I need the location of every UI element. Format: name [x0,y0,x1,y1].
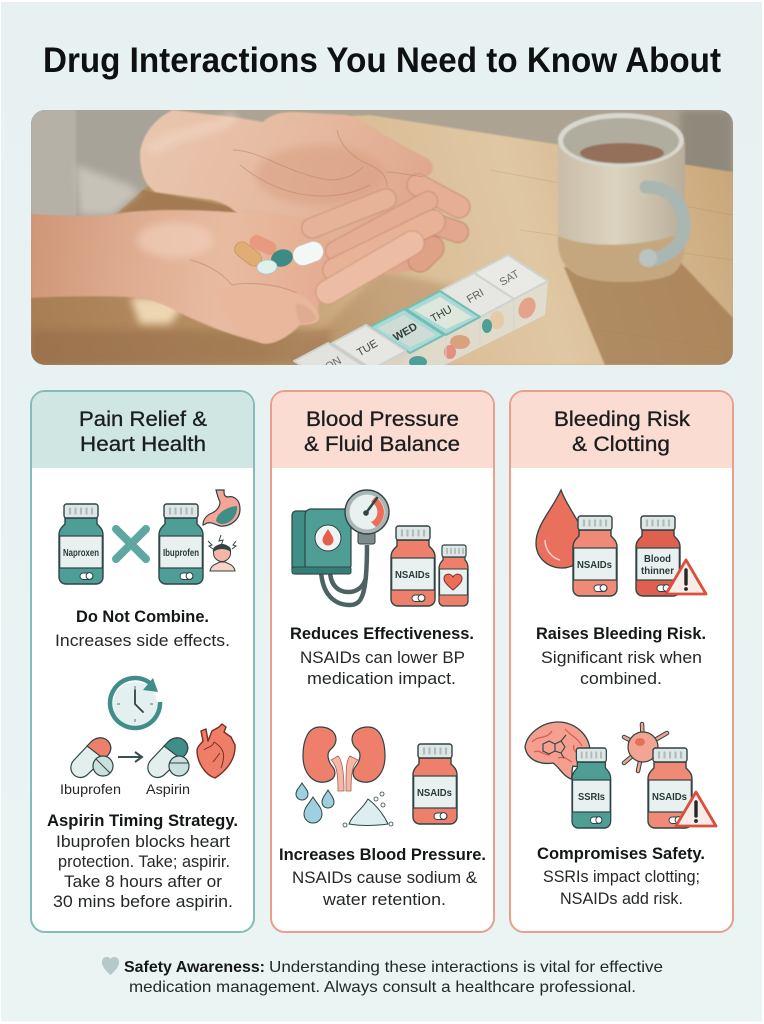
icon: nsaids bottle [573,516,617,596]
icon: do not combine cross [116,529,146,559]
icon: headache [208,535,236,571]
icon: kidneys [303,727,385,791]
text: aspirin timing strategy [47,812,238,911]
panel: bleeding risk and clotting [510,391,733,932]
text: reduces effectiveness: medication impact. [307,670,456,688]
icon: blood thinner bottle with warning: Blood [644,553,671,565]
photo: weekly pill organizer: TUE [355,338,380,359]
text: do not combine: Do Not Combine. [76,608,209,626]
icon: aspirin capsule [148,738,189,777]
text: increases blood pressure [279,846,486,909]
heading: blood pressure: Blood Pressure [306,408,459,431]
text: reduces effectiveness [290,625,474,688]
arrow: ibuprofen to aspirin [118,752,142,762]
photo: upper hand back fingers [418,185,459,260]
icon: nsaids bottle [413,744,457,824]
icon: nsaids bottle: NSAIDs [395,569,430,581]
heading: bleeding risk: & Clotting [572,433,670,456]
text: compromises safety: NSAIDs add risk. [560,890,683,908]
text: do not combine: Increases side effects. [55,632,230,650]
photo: weekly pill organizer: SAT [498,268,522,289]
icon: blood thinner bottle with warning [636,516,706,596]
text: increases blood pressure: Increases Blood Pressure. [279,846,486,864]
labels: ibuprofen and aspirin [60,781,190,797]
icon: clock with rotating arrow [110,678,160,728]
labels: ibuprofen and aspirin: Ibuprofen [60,781,121,797]
text: raises bleeding risk: Raises Bleeding Risk. [536,625,706,643]
icon: stomach [203,490,240,526]
icon: blood pressure cuff and gauge [292,490,389,605]
icon: nsaids bottle: NSAIDs [577,559,612,571]
icon: salt pile [343,792,393,827]
text: increases blood pressure: NSAIDs cause sodium & [292,869,477,887]
panel: blood pressure and fluid balance [271,391,494,932]
text: compromises safety: Compromises Safety. [537,845,705,863]
photo: lower hand [31,199,433,343]
icon: naproxen bottle [59,504,103,584]
icon: nsaids bottle: NSAIDs [417,787,452,799]
photo: weekly pill organizer: WED [391,321,420,344]
text: raises bleeding risk [536,625,706,688]
text: aspirin timing strategy: Take 8 hours after or [64,873,223,891]
heading: blood pressure [304,408,460,456]
photo: lower hand fingers [312,199,433,292]
icon: nsaids bottle with warning [648,748,716,828]
icon: brain [525,722,590,779]
labels: ibuprofen and aspirin: Aspirin [146,781,190,797]
text: aspirin timing strategy: protection. Take; aspirir. [58,853,230,871]
icon: ibuprofen bottle: Ibuprofen [163,547,199,559]
heading: bleeding risk: Bleeding Risk [554,408,691,431]
footer: safety awareness note: Safety Awareness: [124,959,265,976]
text: compromises safety [537,845,705,908]
text: aspirin timing strategy: Ibuprofen blocks heart [56,833,230,851]
title: Drug Interactions You Need to Know About [43,41,721,80]
icon: blood drop [536,490,586,568]
photo: weekly pill organizer: FRI [465,287,486,306]
heading: pain relief: Heart Health [80,433,206,456]
photo: grey sleeve [31,110,142,214]
heading: pain relief [79,408,207,456]
icon: blood thinner bottle with warning: thinner [641,565,674,577]
text: raises bleeding risk: Significant risk when [541,649,702,667]
icon: nsaids bottle with warning: NSAIDs [652,791,687,803]
icon: platelet cell [624,724,667,771]
text: increases blood pressure: water retention. [322,891,446,909]
icon: naproxen bottle: Naproxen [63,547,99,559]
heading: blood pressure: & Fluid Balance [304,433,460,456]
icon: ibuprofen capsule [71,738,113,777]
footer: safety awareness note: Understanding these interactions is vital for effective [269,959,663,976]
photo: weekly pill organizer [293,254,549,365]
heading: pain relief: Pain Relief & [79,408,207,431]
text: reduces effectiveness: Reduces Effectiveness. [290,625,474,643]
icon: ibuprofen bottle [159,504,203,584]
icon: ssris bottle [572,748,611,828]
icon: heart [102,957,119,975]
photo: weekly pill organizer: MON [315,355,344,378]
photo: upper hand [140,110,459,280]
photo: pills in palm [234,235,324,274]
hero photo: hands holding pills beside a mug and weekly pill organizer [31,110,733,365]
photo: wooden table [31,115,733,365]
text: raises bleeding risk: combined. [580,670,662,688]
text: compromises safety: SSRIs impact clotting; [543,868,700,886]
text: aspirin timing strategy: Aspirin Timing Strategy. [47,812,238,830]
icon: heart anatomy [197,724,235,778]
heading: bleeding risk [554,408,691,456]
footer: safety awareness note: medication management. Always consult a healthcare professional. [129,979,636,996]
footer: safety awareness note [102,957,663,996]
text: reduces effectiveness: NSAIDs can lower BP [300,649,465,667]
photo: weekly pill organizer: THU [429,304,454,325]
photo: coffee mug [558,113,685,282]
text: aspirin timing strategy: 30 mins before aspirin. [53,893,233,911]
text: do not combine [55,608,230,650]
icon: nsaids bottle [391,526,435,606]
panel: pain relief and heart health [31,391,254,932]
icon: ssris bottle: SSRIs [578,791,605,803]
icon: small heart medication bottle [439,545,468,606]
icon: water drops [296,783,334,823]
